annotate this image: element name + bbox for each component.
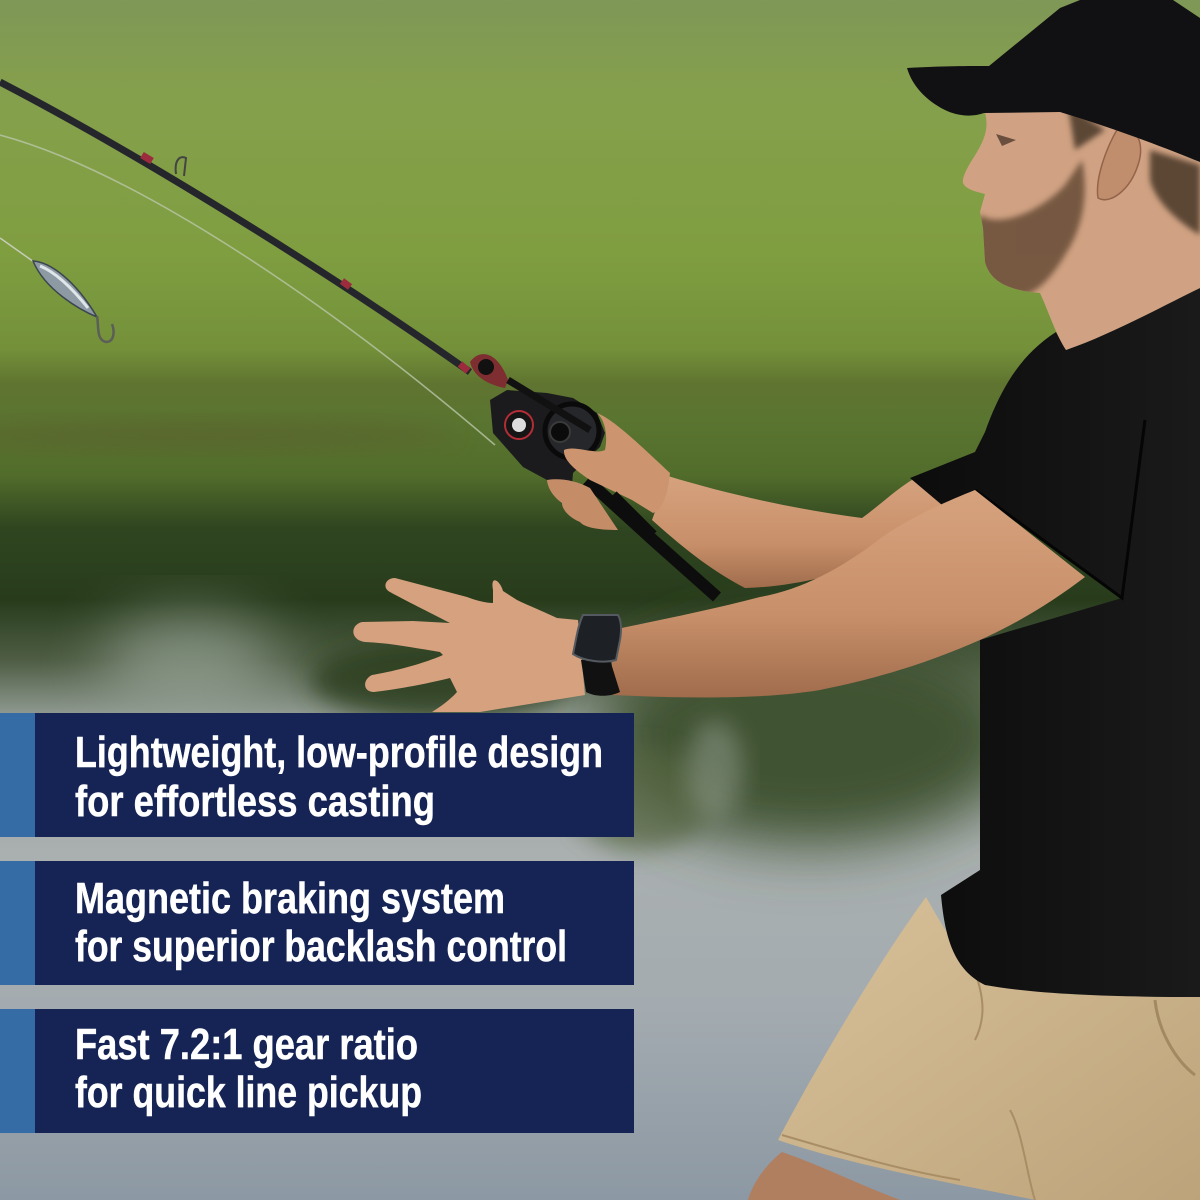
smart watch: [573, 615, 621, 696]
icon: metal lure with hook: [0, 238, 114, 342]
feature callout 2: for superior backlash control: [75, 922, 567, 971]
open front hand: [353, 578, 585, 712]
feature callout 2: [0, 861, 634, 985]
feature callout 1: for effortless casting: [75, 777, 435, 826]
baitcasting reel: [470, 354, 605, 485]
rod grip: [587, 480, 717, 597]
hand gripping the reel: [547, 413, 670, 536]
hair: [1068, 105, 1200, 235]
feature callout 3: [0, 1009, 634, 1133]
khaki shorts: [778, 897, 1200, 1200]
black baseball cap: [907, 0, 1200, 162]
feature callout 2: Magnetic braking system: [75, 874, 505, 923]
man's back leg: [748, 1152, 900, 1200]
feature callout 1: [0, 713, 634, 837]
ear: [1097, 128, 1141, 200]
fishing line: [0, 135, 495, 445]
eye: [996, 134, 1016, 146]
black t-shirt: [910, 288, 1200, 997]
feature callout 1: Lightweight, low-profile design: [75, 728, 603, 777]
man's neck and head: [963, 105, 1200, 350]
front arm: [612, 490, 1085, 697]
feature callout 3: Fast 7.2:1 gear ratio: [75, 1020, 418, 1069]
beard: [975, 160, 1085, 295]
back arm holding the rod: [652, 476, 945, 588]
fishing rod: [0, 82, 470, 372]
feature callout 3: for quick line pickup: [75, 1068, 422, 1117]
